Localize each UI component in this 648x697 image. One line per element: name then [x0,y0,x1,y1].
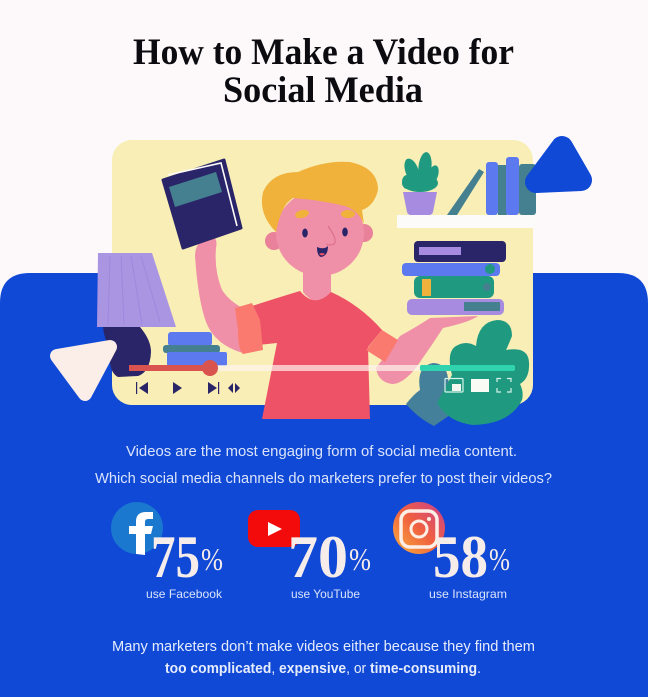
progress bar [129,360,515,376]
sleeves [235,303,263,354]
hair [262,162,378,232]
title: How to Make a Video for [133,32,514,73]
character: boy holding books [195,162,478,419]
hair highlights [294,208,355,220]
title: Social Media [223,70,423,111]
ears [265,232,283,250]
large green leaf [437,320,529,425]
label: use Instagram [429,587,507,601]
small book stack [163,332,227,366]
intro text: Which social media channels do marketers prefer to post their videos? [95,471,552,487]
panel: cream video frame [112,140,533,405]
panel: blue background [0,273,648,697]
70 percent: % [349,541,371,577]
70 percent: 70 [288,524,348,590]
icon: Facebook [111,502,163,555]
shirt [252,291,382,419]
icon: blue triangle [536,147,581,182]
stat: Facebook [111,502,223,601]
lamp [97,253,176,377]
shelf [397,215,536,228]
face [276,190,364,276]
neck [303,265,331,301]
label: use Facebook [146,587,223,601]
58 percent: % [489,541,510,577]
75 percent: 75 [151,524,200,590]
small blue-grey leaf [406,363,453,426]
icon: potted plant [401,151,441,215]
58 percent: 58 [433,524,488,590]
lower arm [376,316,478,384]
75 percent: % [201,541,223,577]
label: use YouTube [291,587,360,601]
icon: YouTube [248,510,300,547]
book held up [163,160,241,248]
illustration: video player scene [57,140,581,426]
closing text: too complicated, expensive, or time-consuming. [165,661,481,677]
nose [326,226,335,245]
eyes [302,228,308,238]
icon: Instagram [393,502,445,554]
stat: YouTube [248,510,371,601]
title [133,32,514,111]
window control icons [445,378,511,392]
books on shelf [447,157,536,215]
playback buttons [136,382,240,394]
closing text [112,639,535,677]
intro text [95,444,552,487]
stat: Instagram [393,502,510,601]
icon: white play triangle [57,347,110,394]
raised arm [195,236,252,353]
closing text: Many marketers don’t make videos either because they find them [112,639,535,655]
intro text: Videos are the most engaging form of social media content. [126,444,517,460]
stacked books on hand [402,241,506,315]
mouth [317,246,328,257]
